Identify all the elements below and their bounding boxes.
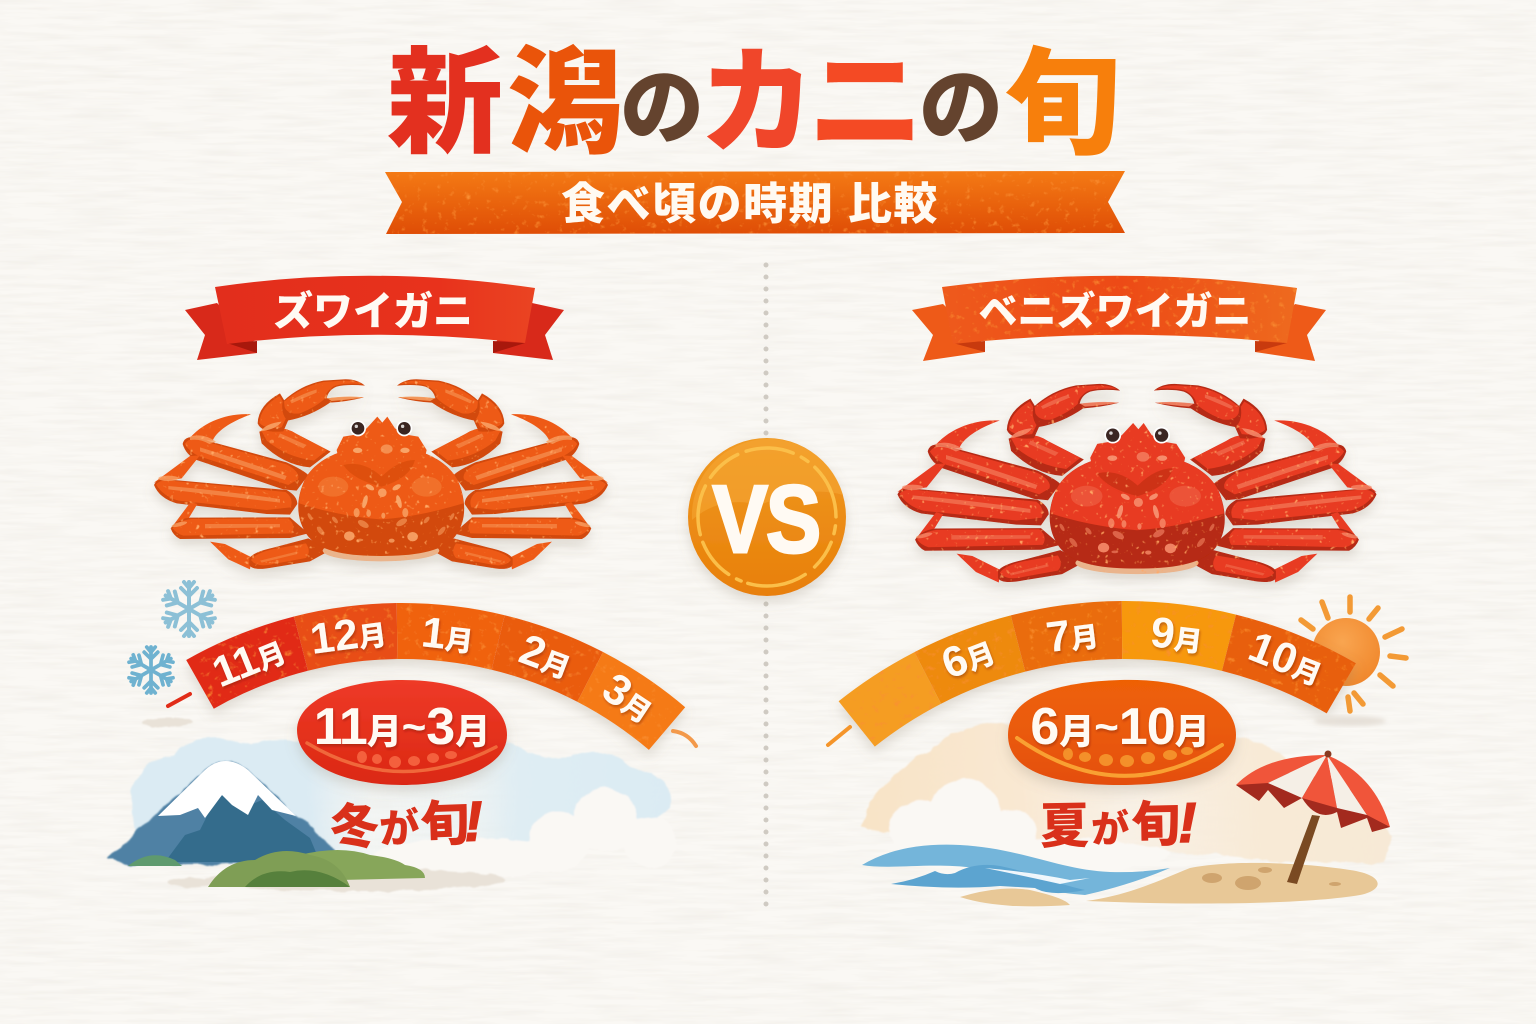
small tick marks: winter: [168, 694, 696, 746]
title: の: [919, 61, 1003, 155]
period pill: winter: 3: [426, 698, 455, 756]
month labels: summer: [935, 608, 1330, 695]
crab: ベニズワイガニ: [897, 384, 1376, 582]
icon: snowflake small: [128, 647, 174, 693]
period pill: summer: [1008, 680, 1236, 785]
text: 夏が旬!: 夏: [1040, 800, 1090, 854]
icon: waves: [862, 845, 1170, 895]
text: 冬が旬!: !: [463, 789, 484, 853]
winter clouds: [131, 738, 676, 878]
month labels: winter: 12月: [307, 606, 389, 664]
title: [387, 38, 1120, 169]
ribbon: ズワイガニ: ズワイガニ: [273, 289, 473, 334]
month band: winter: [186, 603, 685, 750]
ground stain: winter: [142, 718, 505, 891]
month labels: winter: 1月: [419, 608, 476, 662]
text: 夏が旬!: [1039, 791, 1197, 856]
title: カ: [699, 38, 815, 168]
period pill: summer: 6月: [1030, 698, 1094, 756]
text: 冬が旬!: 旬: [419, 797, 470, 852]
title: 新: [387, 38, 503, 168]
text: 夏が旬!: が: [1091, 808, 1130, 852]
period pill: summer: ~: [1094, 703, 1119, 750]
icon: sand: [960, 863, 1378, 906]
title: の: [620, 61, 704, 155]
icon: sun: [1301, 597, 1406, 711]
ribbon: ズワイガニ: [185, 276, 564, 360]
text: 冬が旬!: 冬: [329, 800, 380, 856]
month labels: winter: 3月: [594, 664, 664, 733]
icon: mountain: [108, 761, 340, 866]
crab: ズワイガニ: [154, 379, 608, 569]
subtitle banner: 食べ頃の時期 比較: [561, 180, 939, 229]
subtitle banner: [385, 171, 1125, 234]
text: 夏が旬!: 旬: [1131, 798, 1181, 853]
period pill: winter: [297, 680, 507, 785]
VS coin: VS: [713, 465, 819, 572]
month labels: winter: 2月: [513, 625, 579, 688]
title: 旬: [1004, 39, 1120, 169]
period pill: summer: 月: [1175, 713, 1210, 752]
title: ニ: [808, 38, 924, 168]
VS coin: [670, 420, 864, 614]
month labels: winter: 11月: [206, 625, 292, 697]
center dotted divider: [764, 265, 768, 905]
text: 夏が旬!: !: [1177, 791, 1197, 854]
title: 潟: [507, 38, 623, 168]
month labels: summer: 7月: [1044, 608, 1101, 662]
month labels: summer: 10月: [1242, 623, 1330, 695]
period pill: winter: 月: [455, 713, 490, 752]
month labels: summer: 9月: [1148, 608, 1205, 662]
summer clouds: [862, 722, 1392, 871]
period pill: winter: ~: [402, 703, 426, 750]
ribbon: ベニズワイガニ: ベニズワイガニ: [978, 290, 1252, 334]
text: 冬が旬!: が: [378, 806, 420, 852]
month labels: summer: 6月: [935, 625, 1001, 689]
small tick mark: summer: [828, 727, 850, 745]
month labels: winter: [206, 606, 664, 733]
icon: green hills: [208, 850, 425, 887]
period pill: winter: 11月: [314, 698, 402, 756]
month band: summer: [839, 601, 1356, 747]
icon: beach umbrella: [1236, 750, 1390, 884]
text: 冬が旬!: [329, 789, 484, 858]
icon: snowflake large: [162, 582, 216, 636]
ribbon: ベニズワイガニ: [912, 276, 1326, 361]
period pill: summer: 10: [1119, 698, 1175, 756]
sun shadow stain: [1314, 716, 1386, 726]
